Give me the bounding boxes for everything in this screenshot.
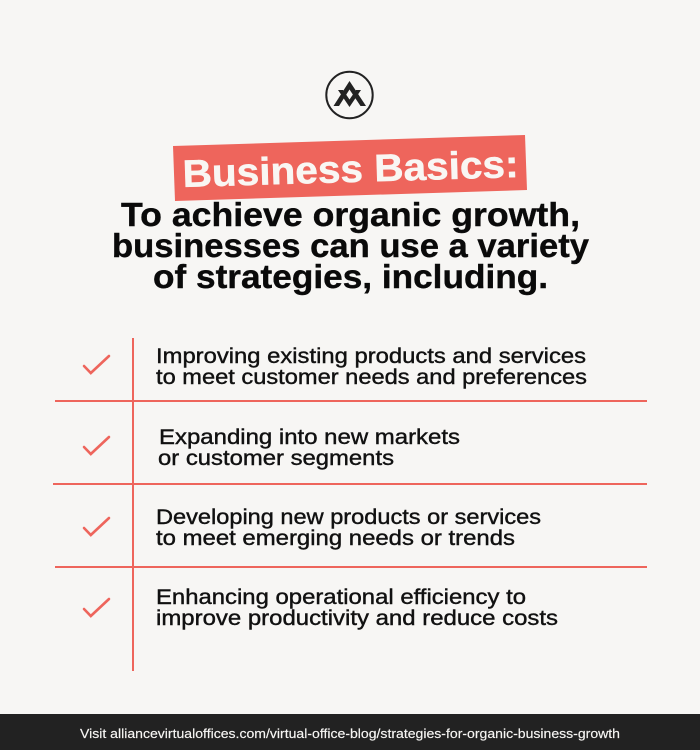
icon: mountain logo bbox=[326, 72, 373, 118]
row 2: expanding markets: or customer segments bbox=[158, 447, 394, 470]
footer bar: Visit alliancevirtualoffices.com/virtual-office-blog/strategies-for-organic-business-growth bbox=[80, 726, 620, 741]
row 1: improving products: Improving existing products and services bbox=[156, 345, 586, 368]
row 3: developing products: Developing new products or services bbox=[156, 506, 541, 529]
heading: subtitle: of strategies, including. bbox=[153, 259, 548, 296]
row 2: expanding markets: Expanding into new markets bbox=[159, 426, 460, 449]
table grid lines bbox=[53, 338, 647, 671]
heading: subtitle: To achieve organic growth, bbox=[121, 197, 580, 234]
row 4: operational efficiency bbox=[84, 586, 558, 630]
row 1: improving products: to meet customer needs and preferences bbox=[156, 366, 587, 389]
row 2: expanding markets bbox=[84, 426, 460, 470]
heading badge: Business Basics: Business Basics: bbox=[182, 143, 519, 196]
heading: subtitle bbox=[112, 197, 589, 296]
footer bar bbox=[0, 714, 700, 750]
row 1: improving products bbox=[84, 345, 587, 389]
row 4: operational efficiency: improve productivity and reduce costs bbox=[156, 607, 558, 630]
row 3: developing products: to meet emerging needs or trends bbox=[156, 527, 515, 550]
row 3: developing products bbox=[84, 506, 541, 550]
row 4: operational efficiency: Enhancing operational efficiency to bbox=[156, 586, 526, 609]
heading: subtitle: businesses can use a variety bbox=[112, 228, 589, 265]
